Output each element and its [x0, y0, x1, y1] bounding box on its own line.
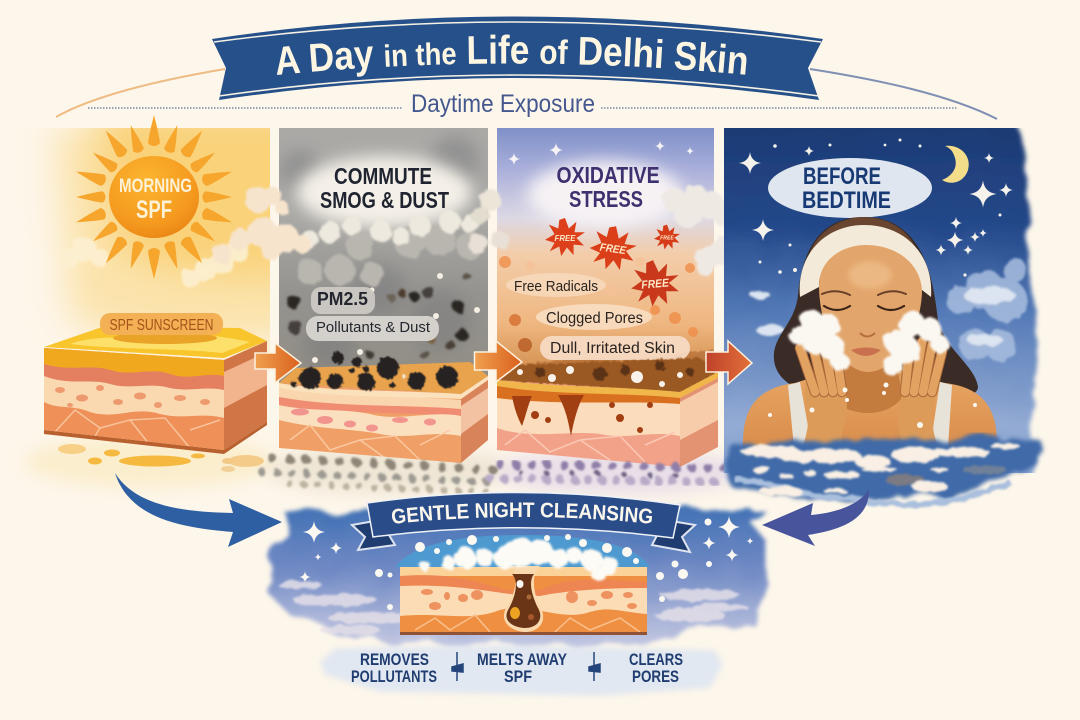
free radical bursts: FREE: [641, 277, 670, 292]
title banner: [56, 16, 998, 120]
ground wash under the blocks: [25, 436, 745, 494]
panel: oxidative stress: [468, 128, 724, 486]
banner: [366, 492, 681, 539]
title text: A Day in the Life of Delhi Skin: [276, 34, 746, 77]
stars: [739, 138, 1013, 277]
arrow: morning to commute: [255, 343, 301, 383]
sparkles: [300, 516, 754, 610]
heading: COMMUTE: [334, 163, 432, 189]
headband: [800, 225, 931, 297]
watercolor background: [265, 505, 770, 645]
woman washing face: [743, 217, 997, 450]
benefit: clears pores: CLEARS: [629, 650, 683, 669]
panel: before bedtime: [700, 100, 1041, 520]
arrow: commute to oxidative stress: [474, 341, 522, 382]
hair: [774, 217, 978, 398]
damaged skin block: [495, 358, 718, 470]
SPF sunscreen tag: SPF SUNSCREEN: [110, 317, 214, 334]
benefit: clears pores: PORES: [632, 667, 679, 686]
pollutants tag: Pollutants & Dust: [316, 320, 430, 336]
arrow: morning to night cleansing: [115, 473, 282, 547]
sunscreen splashes: [58, 444, 264, 472]
free radical bursts: FREE: [599, 242, 627, 257]
clean skin cross-section: [400, 537, 647, 636]
bubble heading: [768, 158, 932, 218]
banner: GENTLE NIGHT CLEANSING: [392, 502, 652, 524]
bubble heading: BEDTIME: [802, 187, 891, 214]
foam on top of skin: [420, 537, 619, 581]
face: [819, 240, 922, 372]
nose and mouth: [860, 333, 875, 336]
clouds: [58, 237, 249, 287]
residue on the ground: [490, 464, 725, 482]
panel wash: [38, 128, 270, 360]
panel wash: [497, 128, 714, 392]
SPF sunscreen tag: [100, 313, 223, 335]
divider: [589, 652, 600, 681]
panel: gentle night cleansing: [264, 492, 772, 698]
bubbles: [415, 534, 639, 564]
soot on the skin: [291, 352, 458, 391]
heading: [556, 162, 660, 212]
moon: [942, 146, 969, 183]
night wash: [724, 128, 1041, 473]
white clouds across the gap: [468, 184, 768, 276]
foam on the cheeks: [789, 310, 949, 376]
label: dull, irritated skin: Dull, Irritated Skin: [550, 340, 675, 357]
halo behind heading: [296, 156, 472, 228]
label: dull, irritated skin: [540, 336, 690, 360]
benefit: removes pollutants: [351, 650, 437, 686]
benefit: removes pollutants: POLLUTANTS: [351, 667, 437, 686]
water and foam: [728, 439, 1041, 504]
label: free radicals: [506, 273, 606, 297]
sun label: SPF: [136, 196, 172, 224]
ribbon: [212, 16, 823, 100]
panel wash: [279, 128, 488, 394]
small banner tails: [352, 520, 395, 550]
divider: [452, 652, 463, 681]
label: clogged pores: Clogged Pores: [546, 310, 643, 327]
free radical bursts: FREE: [660, 235, 674, 241]
heading: OXIDATIVE: [556, 162, 660, 188]
small sparkles: [508, 141, 694, 165]
panel: commute smog and dust: [212, 128, 500, 492]
decorative arc, sun side: [56, 69, 225, 117]
pollutants tag: [306, 316, 439, 341]
PM2.5 tag: PM2.5: [317, 289, 368, 309]
heading: [320, 163, 449, 213]
pore: [504, 566, 543, 632]
benefit: removes pollutants: REMOVES: [360, 650, 429, 669]
closed eyes and brows: [822, 291, 906, 310]
sun label: [119, 176, 192, 224]
shoulders and chest: [743, 372, 997, 448]
section label: daytime exposure: Daytime Exposure: [411, 90, 595, 118]
smog clouds: [297, 211, 484, 286]
panel: morning SPF: [38, 115, 270, 472]
benefit: melts away SPF: [477, 650, 568, 686]
bubble heading: BEFORE: [803, 163, 881, 190]
sun rays: [74, 115, 234, 279]
label: free radicals: Free Radicals: [514, 279, 598, 295]
dust on the ground: [262, 458, 500, 492]
peach clouds across the gap: [212, 187, 311, 264]
night clouds: [750, 258, 1027, 361]
benefit: clears pores: [629, 650, 683, 686]
sun disc: [109, 156, 199, 238]
particles: [287, 272, 470, 360]
benefit: melts away SPF: MELTS AWAY: [477, 650, 568, 669]
PM2.5 tag: [311, 287, 375, 314]
free radical bursts: FREE: [555, 233, 576, 243]
hands and forearms: [800, 342, 942, 450]
sun label: MORNING: [119, 176, 192, 197]
benefit: melts away SPF: SPF: [504, 667, 532, 686]
decorative arc, night side: [810, 69, 997, 119]
free radical bursts: [545, 218, 681, 308]
arrow: bedtime to night cleansing: [762, 489, 869, 546]
heading: STRESS: [569, 186, 643, 212]
soft clouds: [278, 581, 748, 635]
skin block with SPF layer: [40, 326, 267, 455]
arrow: oxidative stress to bedtime: [706, 341, 752, 384]
skin block with pollution: [275, 352, 488, 470]
water glow above skin: [395, 535, 650, 567]
halo behind heading: [527, 161, 683, 229]
label: clogged pores: [536, 304, 652, 330]
benefit strip: [320, 645, 723, 696]
heading: SMOG & DUST: [320, 187, 449, 213]
